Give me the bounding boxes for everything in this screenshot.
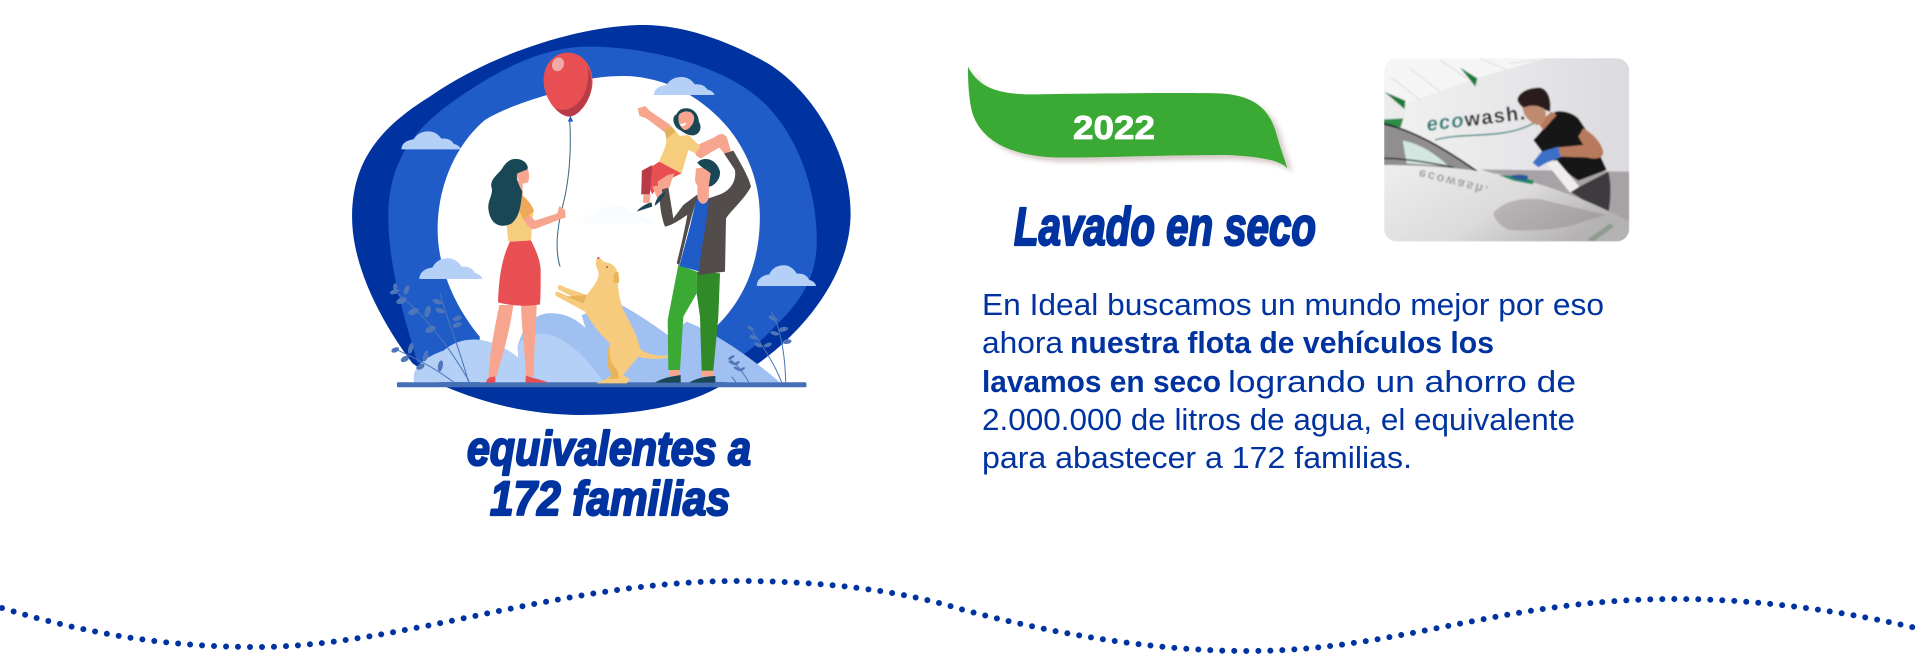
line 3: logrando un ahorro de (1228, 364, 1576, 399)
dog (555, 257, 677, 383)
balloon (544, 53, 593, 267)
line 5: para abastecer a 172 familias. (982, 440, 1412, 475)
banner year: 2022 (1073, 109, 1155, 146)
white inner circle (438, 76, 760, 383)
caption: equivalentes a 172 familias (467, 423, 751, 526)
woman (486, 159, 566, 383)
clouds (401, 77, 816, 286)
cloud top left (401, 131, 461, 149)
man (655, 133, 751, 383)
cloud mid right (757, 265, 816, 286)
cloud top right (654, 77, 714, 95)
plants left (389, 283, 469, 382)
year banner (968, 67, 1293, 173)
caption line 2: 172 familias (490, 473, 730, 526)
ground line (397, 382, 806, 387)
banner shadow (973, 71, 1293, 173)
line 3 bold: lavamos en seco (982, 364, 1221, 399)
caption line 1: equivalentes a (467, 423, 751, 476)
photo: worker cleaning a car (1384, 58, 1629, 242)
cloud mid left (419, 258, 482, 279)
illustration: family with balloon and dog (352, 25, 851, 415)
banner shape (968, 67, 1287, 168)
line 4: 2.000.000 de litros de agua, el equivalente (982, 402, 1575, 437)
photo: worker cleaning a car: ecowash. (1425, 102, 1526, 136)
line 2: ahora (982, 325, 1064, 360)
heading: Lavado en seco: Lavado en seco (1014, 197, 1316, 257)
faint cloud centre (582, 205, 653, 224)
photo: worker cleaning a car: ecowash. (1417, 166, 1492, 198)
line 2 bold: nuestra flota de vehículos los (1070, 325, 1494, 360)
figures: woman, dog and man (486, 133, 751, 383)
plants right (728, 312, 792, 382)
middle blue blob (388, 47, 817, 368)
line 1: En Ideal buscamos un mundo mejor por eso (982, 287, 1604, 322)
hills (414, 304, 780, 382)
child (637, 106, 726, 212)
body text (982, 287, 1604, 475)
outer dark blue blob (352, 25, 851, 415)
dotted wave divider (2, 581, 1920, 651)
